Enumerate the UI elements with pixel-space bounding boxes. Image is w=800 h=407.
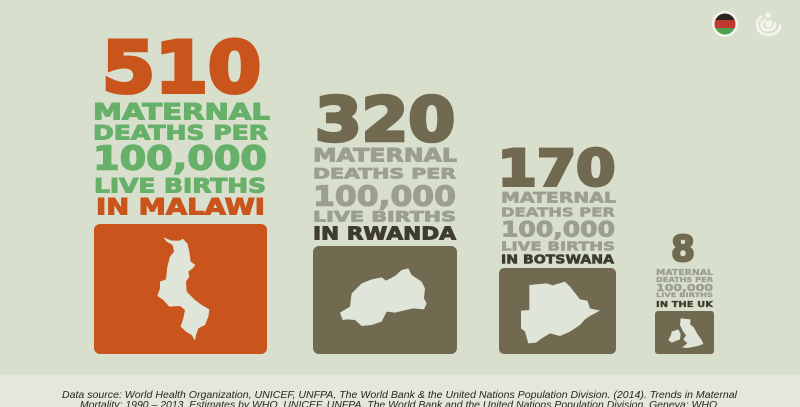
figure: 8: 8: [671, 229, 695, 270]
text: maternal deaths per 100,000 live births: [656, 268, 714, 299]
text: maternal deaths per 100,000 live births: DEATHS PER: [93, 122, 268, 144]
text: maternal deaths per 100,000 live births: LIVE BIRTHS: [313, 210, 456, 226]
figure: 510: 510: [102, 27, 261, 109]
figure: 170: 170: [498, 140, 616, 198]
text: maternal deaths per 100,000 live births: LIVE BIRTHS: [94, 174, 266, 198]
panel: Rwanda: [313, 84, 457, 354]
text: maternal deaths per 100,000 live births: LIVE BIRTHS: [501, 240, 615, 254]
box: Botswana map: [499, 268, 616, 354]
box: Malawi map: [94, 224, 267, 354]
text: maternal deaths per 100,000 live births: 100,000: [93, 138, 267, 178]
text: in the UK: IN THE UK: [656, 300, 714, 309]
text: maternal deaths per 100,000 live births: 100,000: [501, 218, 615, 243]
text: maternal deaths per 100,000 live births: 100,000: [656, 283, 713, 294]
text: maternal deaths per 100,000 live births: 100,000: [313, 180, 456, 212]
text: maternal deaths per 100,000 live births: DEATHS PER: [656, 276, 714, 284]
text: maternal deaths per 100,000 live births: MATERNAL: [501, 191, 616, 207]
box: UK map: [655, 311, 714, 354]
text: maternal deaths per 100,000 live births: MATERNAL: [313, 146, 457, 166]
text: in Rwanda: IN RWANDA: [313, 224, 457, 244]
icon: Malawi flag: [712, 11, 738, 37]
text: in Malawi: IN MALAWI: [96, 196, 265, 220]
footer: data source: [0, 375, 800, 407]
text: maternal deaths per 100,000 live births: DEATHS PER: [501, 206, 615, 220]
text: maternal deaths per 100,000 live births: [93, 100, 270, 198]
box: Rwanda map: [313, 246, 457, 354]
text: maternal deaths per 100,000 live births: LIVE BIRTHS: [656, 291, 713, 299]
text: in Botswana: IN BOTSWANA: [501, 253, 615, 267]
text: maternal deaths per 100,000 live births: MATERNAL: [93, 100, 270, 126]
panel: UK: [655, 229, 714, 354]
figure: 320: 320: [315, 84, 455, 156]
text: maternal deaths per 100,000 live births: [313, 146, 457, 226]
icon: swirl logo: [757, 12, 780, 35]
text: maternal deaths per 100,000 live births: MATERNAL: [656, 268, 713, 277]
text: maternal deaths per 100,000 live births: [501, 191, 616, 254]
footer: data source: Data source: World Health Organization, UNICEF, UNFPA, The World Bank & the United Nations Population Division. (2014). Trends in Maternal: [62, 389, 738, 401]
panel: Botswana: [498, 140, 616, 354]
text: maternal deaths per 100,000 live births: DEATHS PER: [313, 166, 456, 182]
panel: Malawi: [93, 27, 270, 354]
